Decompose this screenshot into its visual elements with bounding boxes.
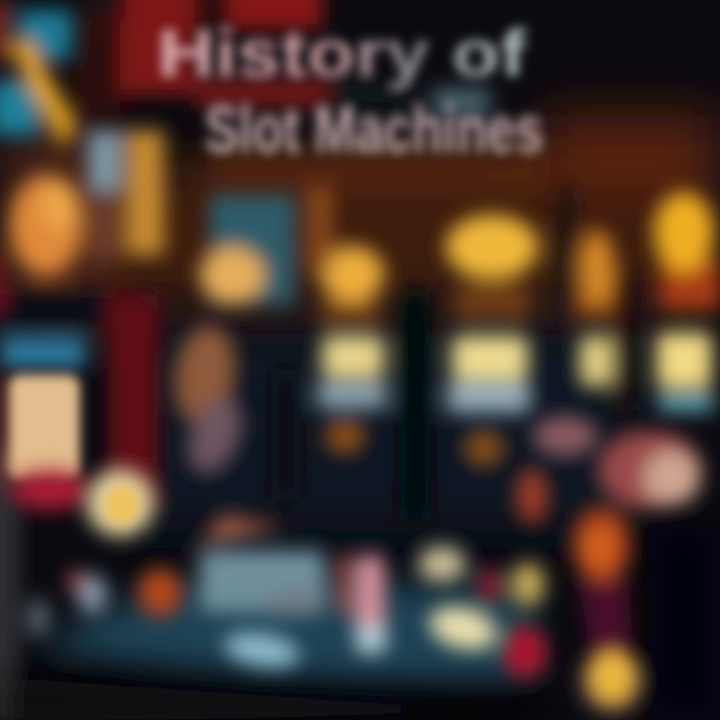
title line 2: Slot Machines (205, 92, 543, 166)
machine screens (322, 336, 384, 378)
title line 1: History of (158, 16, 527, 90)
slot machines row (168, 185, 720, 520)
machine lower panels (318, 382, 386, 408)
items on the table (26, 515, 644, 714)
dark right corner (650, 525, 720, 720)
machine top lamps (200, 247, 264, 303)
title (158, 16, 543, 166)
table surface (0, 580, 550, 720)
left wall posters (0, 0, 164, 720)
background wall and ceiling (0, 0, 720, 530)
chip and coin near left (86, 469, 154, 537)
machine buttons (325, 418, 365, 454)
scattered cards on the right (516, 416, 702, 690)
